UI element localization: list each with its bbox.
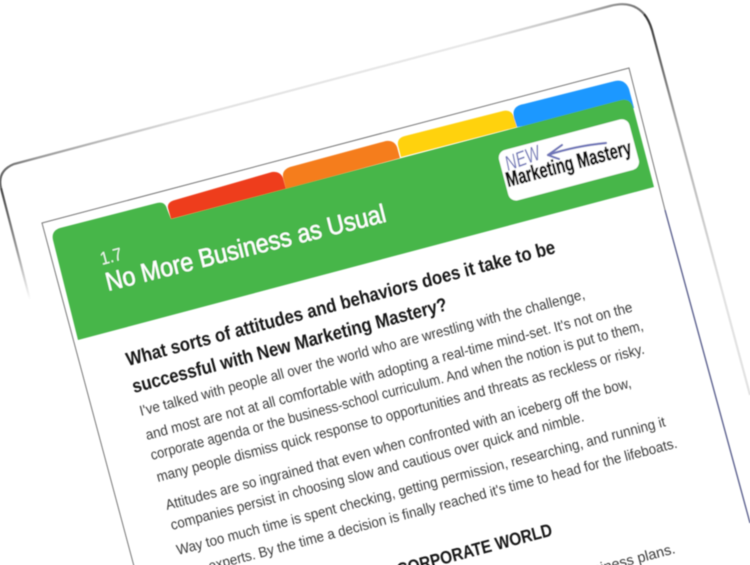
section number: 1.7: [98, 244, 124, 269]
logo word: New: NEW: [502, 141, 545, 176]
section tabs: [168, 81, 634, 219]
body paragraphs: [138, 287, 679, 565]
paragraph 1: corporate agenda or the business-school curriculum. And when the notion is put to them,: [149, 318, 645, 464]
paragraph 3: Way too much time is spent checking, getting permission, researching, and running it: [175, 414, 667, 559]
section title: No More Business as Usual: [102, 198, 389, 297]
paragraph 2: Attitudes are so ingrained that even when confronted with an iceberg off the bow,: [164, 376, 633, 514]
paragraph 1: I've talked with people all over the world who are wrestling with the challenge,: [138, 287, 587, 420]
paragraph 1: many people dismiss quick response to opportunities and threats as reckless or risky.: [155, 342, 646, 486]
logo wordmark: Marketing Mastery: [503, 137, 634, 192]
paragraph 1: and most are not at all comfortable with adopting a real-time mind-set. It's not on the: [144, 300, 634, 444]
tab: yellow: [398, 111, 517, 157]
main question heading: successful with New Marketing Mastery?: [130, 295, 449, 398]
main question heading: What sorts of attitudes and behaviors does it take to be: [124, 237, 558, 371]
tablet frame: [0, 4, 750, 395]
tab: orange: [283, 141, 400, 189]
tab: blue: [513, 81, 634, 127]
main question heading: [124, 237, 558, 398]
logo arrow: [548, 143, 606, 159]
paragraph 2: companies persist in choosing slow and cautious over quick and nimble.: [169, 409, 586, 534]
tab: red: [168, 172, 286, 219]
green header band: [53, 100, 654, 340]
logo: New Marketing Mastery: [497, 118, 641, 202]
